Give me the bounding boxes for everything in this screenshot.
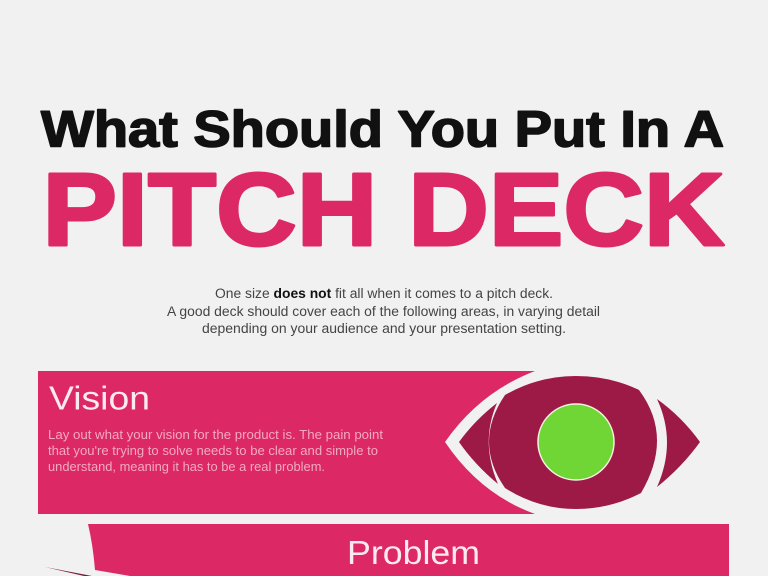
panel: problem	[45, 524, 729, 576]
problem heading: Problem	[347, 534, 480, 571]
intro text: A good deck should cover each of the following areas, in varying detail	[167, 304, 600, 319]
vision body text	[48, 428, 384, 474]
intro text: One size does not fit all when it comes to a pitch deck.	[215, 286, 553, 301]
vision body text: Lay out what your vision for the product is. The pain point	[48, 428, 384, 442]
title line 1: What Should You Put In A	[41, 100, 724, 158]
eye right wing	[657, 399, 700, 487]
icon: eye	[459, 376, 700, 509]
intro text	[167, 286, 600, 336]
title	[41, 100, 724, 267]
problem background	[88, 524, 729, 576]
vision background	[38, 371, 535, 514]
eye left wing	[459, 403, 498, 484]
problem icon fragment	[45, 567, 92, 576]
vision body text: that you're trying to solve needs to be clear and simple to	[48, 444, 378, 458]
panel: vision	[38, 371, 535, 514]
title line 2: PITCH DECK	[42, 152, 724, 267]
vision body text: understand, meaning it has to be a real problem.	[48, 460, 325, 474]
vision heading: Vision	[49, 380, 150, 416]
intro text: depending on your audience and your presentation setting.	[202, 321, 566, 336]
eye centre	[489, 376, 657, 509]
eye pupil	[538, 404, 614, 480]
